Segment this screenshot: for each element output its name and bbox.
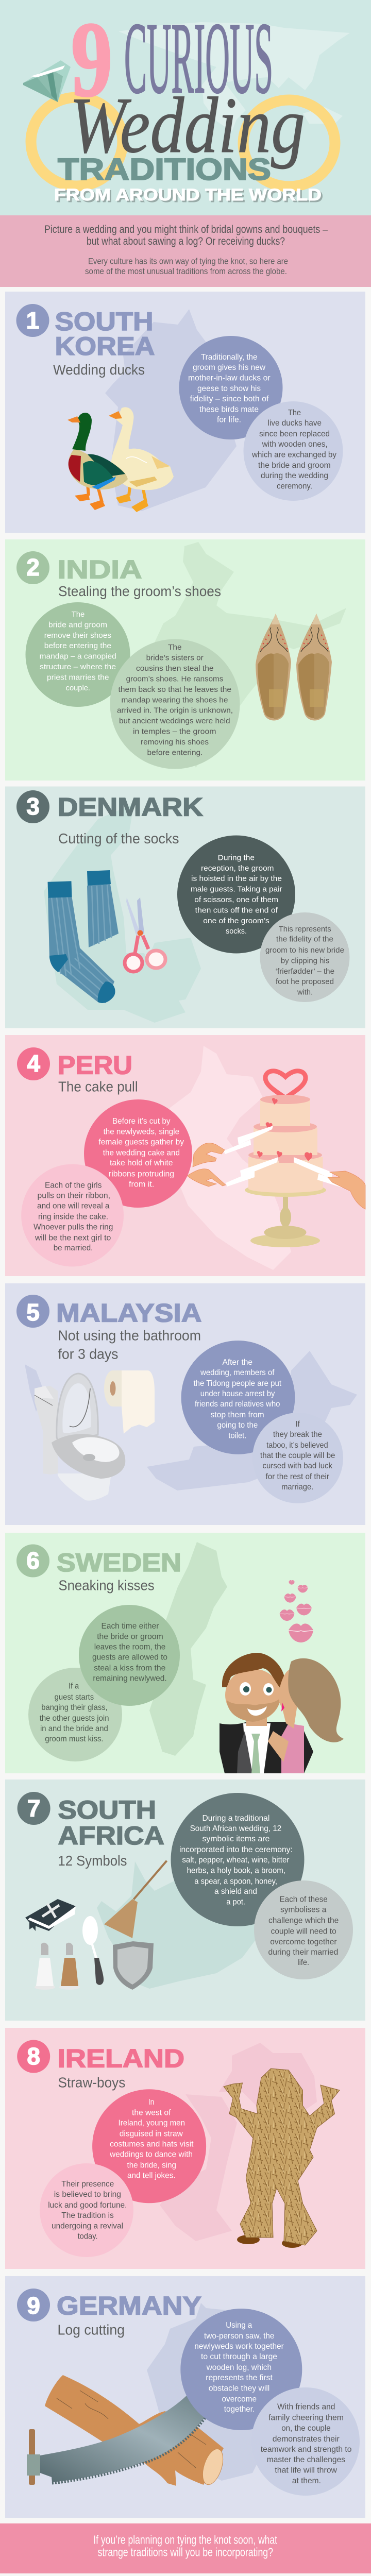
heading: Denmark: DENMARK xyxy=(58,792,203,821)
bubble text: master the challenges xyxy=(267,2455,345,2464)
bubble text: live ducks have xyxy=(268,419,322,428)
bubble text: salt, pepper, wheat, wine, bitter xyxy=(182,1856,290,1865)
bubble text: female guests gather by xyxy=(98,1138,184,1146)
heading: Malaysia: MALAYSIA xyxy=(56,1299,202,1328)
number badge 7 xyxy=(18,1792,50,1825)
bubble text: for the rest of their xyxy=(266,1472,330,1481)
bubble text: During the xyxy=(218,853,255,862)
bubble text xyxy=(268,1895,339,1967)
intro band xyxy=(0,215,371,287)
title numeral 9: 9 xyxy=(71,0,112,118)
bubble text: one of the groom’s xyxy=(203,917,269,925)
bubble text: Before it’s cut by xyxy=(112,1117,170,1126)
bubble text: mandap – a canopied xyxy=(40,652,116,661)
illustration: kissing couple xyxy=(220,1653,344,1773)
bubble text: guests are allowed to xyxy=(92,1653,167,1662)
bubble: two-person saw xyxy=(180,2309,302,2430)
bubble text: priest marries the xyxy=(47,673,109,682)
bubble text: newlyweds work together xyxy=(194,2342,284,2351)
bubble text: that the couple will be xyxy=(260,1451,335,1460)
bubble text: wooden log, which xyxy=(206,2363,272,2372)
bubble text: then cuts off the end of xyxy=(195,906,278,914)
bubble text: a spear, a spoon, honey, xyxy=(194,1877,277,1886)
bubble text xyxy=(194,2321,284,2414)
hand left upper xyxy=(193,1143,225,1167)
number badge 9 xyxy=(17,2289,50,2321)
bubble text: The xyxy=(168,643,181,652)
bubble text second: If a xyxy=(69,1682,79,1691)
illustration: straw man xyxy=(224,2069,340,2248)
bubble text: the newlyweds, single xyxy=(104,1127,179,1136)
bubble text: Traditionally, the xyxy=(201,353,257,362)
bubble text: weddings to dance with xyxy=(109,2150,193,2159)
bubble text: male guests. Taking a pair xyxy=(191,885,282,894)
bubble text xyxy=(260,1420,335,1492)
bubble text: since been replaced xyxy=(259,430,330,438)
number badge 6: 6 xyxy=(26,1547,40,1574)
bubble text: If xyxy=(296,1420,300,1429)
bubble text: the Tidong people are put xyxy=(194,1379,282,1388)
number badge 3 xyxy=(16,790,49,823)
hand right xyxy=(328,1171,365,1209)
bubble text xyxy=(261,2403,352,2485)
bubble text: the bride, sing xyxy=(127,2161,176,2170)
illustration: scissors xyxy=(125,897,165,972)
number badge 4: 4 xyxy=(27,1050,40,1077)
bubble text: Each time either xyxy=(101,1622,159,1631)
bubble text: socks. xyxy=(226,927,247,936)
bubble text: reception, the groom xyxy=(201,864,274,873)
bubble text: Ireland, young men xyxy=(119,2119,185,2128)
bubble text: together. xyxy=(224,2405,255,2414)
closing band xyxy=(0,2523,371,2573)
bubble text xyxy=(92,1622,167,1683)
bubble text: these birds mate xyxy=(199,405,259,414)
bubble text second: in and the bride and xyxy=(40,1724,108,1733)
bubble text: a pot. xyxy=(226,1898,245,1907)
bubble text: incorporated into the ceremony: xyxy=(179,1845,293,1854)
illustration: toilet paper xyxy=(104,1370,155,1434)
bubble: good fortune xyxy=(40,2163,133,2257)
icon: gold ring right xyxy=(243,100,335,187)
title line From around the world: FROM AROUND THE WORLD xyxy=(56,187,323,206)
subtitle: Cutting of the socks xyxy=(58,831,179,846)
bubble text: the wedding cake and xyxy=(103,1148,180,1157)
bubble text: from it. xyxy=(129,1180,154,1189)
bubble text: but ancient weddings were held xyxy=(119,717,230,725)
bubble text: symbolic items are xyxy=(202,1835,269,1843)
bubble text: Each of the girls xyxy=(45,1181,102,1190)
map: India xyxy=(144,542,346,768)
bubble text: fidelity – since both of xyxy=(190,395,269,403)
bubble text: disguised in straw xyxy=(120,2130,183,2139)
bubble text: a shield and xyxy=(214,1887,257,1896)
bubble text: the bride and groom xyxy=(258,461,331,470)
bubble text: cousins then steal the xyxy=(136,664,213,673)
bubble text: remove their shoes xyxy=(44,631,111,640)
bubble text: them back so that he leaves the xyxy=(119,685,231,694)
bubble text: that life will throw xyxy=(275,2466,337,2475)
bubble text: bride’s sisters or xyxy=(146,654,204,663)
heading: Ireland: IRELAND xyxy=(58,2044,184,2073)
heading: South Korea: SOUTH xyxy=(55,307,154,336)
bubble text: undergoing a revival xyxy=(52,2222,123,2231)
number badge 7: 7 xyxy=(27,1795,40,1822)
illustration: goose xyxy=(109,407,174,512)
map: Germany xyxy=(147,2303,273,2481)
bubble text: couple. xyxy=(66,684,90,692)
heading: Peru: PERU xyxy=(58,1051,132,1080)
number badge 8: 8 xyxy=(27,2043,40,2070)
title word Traditions: TRADITIONS xyxy=(58,152,271,187)
bubble text: the west of xyxy=(132,2109,171,2117)
bubble text: groom’s shoes. He ransoms xyxy=(126,674,223,683)
number badge 2: 2 xyxy=(26,554,40,581)
bubble text: structure – where the xyxy=(40,663,116,671)
bubble text: South African wedding, 12 xyxy=(190,1824,281,1833)
bubble text: family cheering them xyxy=(268,2414,344,2422)
bubble text: during the wedding xyxy=(261,471,328,480)
bubble text: mandap wearing the shoes he xyxy=(122,696,228,704)
bubble text xyxy=(194,1358,282,1440)
bubble: taboo xyxy=(252,1413,343,1503)
bubble text: ribbons protruding xyxy=(109,1170,174,1178)
bubble text: to cut through a large xyxy=(201,2352,277,2361)
illustration: saw xyxy=(27,2396,206,2485)
subtitle: Log cutting xyxy=(58,2322,125,2338)
bubble text: going to the xyxy=(217,1421,258,1430)
subtitle: Not using the bathroom xyxy=(58,1328,201,1344)
bubble text: luck and good fortune. xyxy=(48,2201,127,2210)
bubble text: stop them from xyxy=(210,1411,264,1419)
bubble text: The xyxy=(72,610,85,619)
panel: Germany xyxy=(5,2276,365,2518)
header panel xyxy=(0,0,371,215)
number badge 1 xyxy=(16,304,49,337)
bubble text: two-person saw, the xyxy=(204,2332,274,2341)
bubble text: couple will need to xyxy=(271,1927,336,1936)
bubble text xyxy=(251,409,336,490)
bubble text: With friends and xyxy=(277,2403,335,2412)
bubble text: remaining newlywed. xyxy=(93,1674,167,1683)
subtitle: for 3 days xyxy=(58,1346,119,1362)
hand left lower xyxy=(187,1169,226,1187)
title line From around the world: FROM AROUND THE WORLD xyxy=(54,185,322,204)
bubble text: and tell jokes. xyxy=(127,2172,176,2180)
bubble text second: guest starts xyxy=(55,1693,94,1702)
bubble text: with wooden ones, xyxy=(262,440,328,449)
bubble text second: groom must kiss. xyxy=(45,1735,104,1743)
heading: South Africa: AFRICA xyxy=(58,1821,164,1850)
bubble text xyxy=(179,1814,293,1907)
number badge 5 xyxy=(16,1295,49,1328)
bubble text xyxy=(48,2180,127,2241)
bubble text: removing his shoes xyxy=(141,738,209,747)
bubble text: before entering the xyxy=(44,641,111,650)
closing question xyxy=(93,2533,277,2559)
icon: floating kisses xyxy=(280,1580,313,1642)
number badge 2 xyxy=(16,551,49,584)
bubble text: Their presence xyxy=(61,2180,114,2189)
bubble text: today. xyxy=(78,2232,98,2241)
icon: shield xyxy=(113,1941,154,1990)
number badge 6 xyxy=(16,1545,49,1578)
bubble text: groom to his new bride xyxy=(265,946,344,955)
bubble text: on, the couple xyxy=(281,2424,331,2433)
bubble text: This represents xyxy=(279,925,331,934)
icon: spoon xyxy=(82,1916,104,1985)
map: Denmark xyxy=(44,804,201,1023)
bubble text: groom gives his new xyxy=(193,363,265,372)
bubble text: the bride or groom xyxy=(97,1633,163,1641)
map: Sweden xyxy=(149,1542,227,1756)
bubble text: and one will reveal a xyxy=(37,1202,110,1211)
number badge 1: 1 xyxy=(26,307,39,334)
heading: South Korea xyxy=(55,307,155,361)
subtitle: Straw-boys xyxy=(58,2075,125,2091)
bubble: socks cut xyxy=(177,836,295,953)
icon: broom xyxy=(104,1861,167,1938)
bubble: house arrest xyxy=(181,1341,295,1454)
title word Wedding: Wedding xyxy=(70,81,305,170)
map: South Korea xyxy=(105,309,237,511)
bubble: removing shoes xyxy=(26,602,130,707)
panel: Peru xyxy=(5,1035,365,1276)
bubble text: cursed with bad luck xyxy=(263,1462,333,1470)
bubble text xyxy=(98,1117,184,1189)
bubble text: friends and relatives who xyxy=(195,1400,280,1409)
bubble text: The xyxy=(288,409,301,417)
illustration: mallard xyxy=(68,413,128,510)
ribbons xyxy=(224,1126,352,1190)
bubble text: they break the xyxy=(273,1430,322,1439)
panel: Malaysia xyxy=(5,1283,365,1525)
illustration: pair of shoes xyxy=(256,614,332,720)
number badge 3: 3 xyxy=(26,793,40,820)
subtitle: Wedding ducks xyxy=(53,362,145,378)
bubble text: with. xyxy=(297,988,313,997)
bubble text: is believed to bring xyxy=(54,2190,121,2199)
bubble text: at them. xyxy=(292,2477,321,2485)
bubble text xyxy=(33,1181,113,1252)
bubble text: overcome together xyxy=(270,1938,337,1946)
heading: South Korea: KOREA xyxy=(55,332,155,361)
icon: diamond xyxy=(23,60,71,102)
closing question: strange traditions will you be incorporating? xyxy=(98,2546,273,2559)
bubble text: marriage. xyxy=(281,1483,313,1492)
bubble: 12 symbols xyxy=(171,1793,304,1926)
subtitle: Stealing the groom’s shoes xyxy=(58,583,221,599)
subtitle: 12 Symbols xyxy=(58,1853,127,1869)
bubble text xyxy=(188,353,271,425)
bubble text: bride and groom xyxy=(48,620,107,629)
bubble: wooden ducks xyxy=(243,401,343,501)
bubble text: demonstrates their xyxy=(273,2435,340,2444)
illustration: wedding cake xyxy=(187,1071,365,1247)
bubble text: After the xyxy=(223,1358,252,1367)
panel: Sweden xyxy=(5,1533,365,1773)
icon: salt shaker xyxy=(35,1943,55,1990)
panel: India xyxy=(5,539,365,781)
bubble: straw boys xyxy=(92,2089,206,2203)
bubble text: symbolises a xyxy=(280,1906,326,1914)
map: South Africa xyxy=(97,1861,258,1989)
map: Malaysia xyxy=(25,1351,357,1490)
bubble text: by clipping his xyxy=(281,956,329,965)
bubble: challenges xyxy=(254,1880,353,1979)
illustration: toilet xyxy=(35,1374,125,1501)
icon: pepper shaker xyxy=(59,1943,80,1990)
bubble: stealing kiss xyxy=(28,1605,180,1761)
bubble text: under house arrest by xyxy=(200,1389,275,1398)
bubble text: the fidelity of the xyxy=(276,935,333,944)
number badge 4 xyxy=(17,1047,50,1080)
bubble text: Each of these xyxy=(279,1895,328,1904)
bubble text: which are exchanged by xyxy=(251,451,336,460)
bubble text: during their married xyxy=(268,1948,338,1957)
bubble text: be married. xyxy=(54,1244,93,1252)
map: Ireland xyxy=(160,2043,317,2241)
intro lead text: but what about sawing a log? Or receiving ducks? xyxy=(87,235,285,247)
bubble text xyxy=(191,853,282,936)
number badge 9: 9 xyxy=(27,2292,40,2319)
bubble text second: banging their glass, xyxy=(41,1703,108,1712)
bubble text: ceremony. xyxy=(277,482,312,490)
bubble text: wedding, members of xyxy=(200,1368,275,1377)
intro secondary text: some of the most unusual traditions from across the globe. xyxy=(85,266,287,276)
illustration: log xyxy=(45,2375,227,2487)
bubble text: represents the first xyxy=(206,2374,273,2382)
closing question: If you’re planning on tying the knot soon, what xyxy=(93,2533,277,2547)
bubble: ransom xyxy=(110,639,240,769)
bubble text: costumes and hats visit xyxy=(110,2140,194,2149)
panel: Ireland xyxy=(5,2028,365,2269)
bubble text: mother-in-law ducks or xyxy=(188,374,271,383)
panel: South Africa xyxy=(5,1780,365,2021)
bubble text: is hoisted in the air by the xyxy=(191,874,282,883)
bubble text: During a traditional xyxy=(202,1814,269,1823)
bubble text: Whoever pulls the ring xyxy=(33,1223,113,1232)
bubble text: toilet. xyxy=(228,1432,246,1440)
subtitle: Sneaking kisses xyxy=(58,1578,155,1594)
panel: Denmark xyxy=(5,786,365,1028)
heading: South Africa: SOUTH xyxy=(58,1795,156,1824)
bubble text: pulls on their ribbon, xyxy=(37,1191,110,1200)
world map backdrop xyxy=(119,22,350,131)
bubble text: take hold of white xyxy=(110,1159,173,1167)
bubble text: foot he proposed xyxy=(276,977,334,986)
bubble text: leaves the room, the xyxy=(94,1643,165,1652)
heading: Germany: GERMANY xyxy=(57,2291,201,2320)
bubble text: Using a xyxy=(226,2321,252,2330)
bubble text: in temples – the groom xyxy=(133,727,216,736)
bubble: ring reveal xyxy=(21,1164,124,1266)
bubble: cake ribbons xyxy=(84,1099,192,1208)
icon: holy book xyxy=(25,1899,76,1931)
heading: Sweden: SWEDEN xyxy=(57,1548,181,1577)
bubble: teamwork xyxy=(251,2387,360,2496)
icon: gold ring left xyxy=(31,97,123,186)
intro secondary text xyxy=(85,257,288,276)
bubble text: overcome xyxy=(222,2395,257,2404)
bubble text: In xyxy=(148,2098,154,2107)
number badge 8 xyxy=(17,2040,50,2073)
bubble text xyxy=(117,643,233,757)
heading: South Africa xyxy=(58,1795,164,1850)
map: Peru xyxy=(161,1046,291,1270)
bubble text: will be the next girl to xyxy=(35,1233,111,1242)
bubble text: ‘frierfødder’ – the xyxy=(276,967,334,976)
bubble text: obstacle they will xyxy=(209,2384,269,2393)
number badge 5: 5 xyxy=(26,1299,40,1326)
bubble text: arrived in. The origin is unknown, xyxy=(117,706,233,715)
heading: India: INDIA xyxy=(58,555,142,584)
illustration: socks xyxy=(47,870,119,1003)
subtitle: The cake pull xyxy=(58,1079,138,1095)
bubble text: herbs, a holy book, a broom, xyxy=(187,1867,285,1875)
bubble: fidelity xyxy=(260,912,349,1002)
bubble text xyxy=(40,610,116,692)
bubble text: challenge which the xyxy=(268,1917,339,1925)
bubble text second xyxy=(40,1682,109,1743)
intro secondary text: Every culture has its own way of tying the knot, so here are xyxy=(88,257,288,266)
bubble text: life. xyxy=(297,1958,309,1967)
subtitle xyxy=(58,1328,201,1362)
bubble text: taboo, it’s believed xyxy=(266,1441,328,1450)
intro lead text xyxy=(44,224,328,247)
bubble text xyxy=(265,925,344,997)
bubble text: steal a kiss from the xyxy=(94,1664,165,1673)
bubble text: ring inside the cake. xyxy=(38,1212,108,1221)
bubble text: for life. xyxy=(217,415,241,425)
bubble text: before entering. xyxy=(147,748,203,757)
bubble text second: the other guests join xyxy=(40,1714,109,1723)
bubble text: teamwork and strength to xyxy=(261,2445,352,2454)
bubble text: geese to show his xyxy=(197,384,261,393)
bubble: duck gift xyxy=(179,336,282,439)
bubble text: The tradition is xyxy=(61,2211,114,2220)
bubble text: of scissors, one of them xyxy=(194,895,278,904)
panel: South Korea xyxy=(5,292,365,533)
bubble text xyxy=(109,2098,194,2180)
intro lead text: Picture a wedding and you might think of bridal gowns and bouquets – xyxy=(44,224,328,235)
